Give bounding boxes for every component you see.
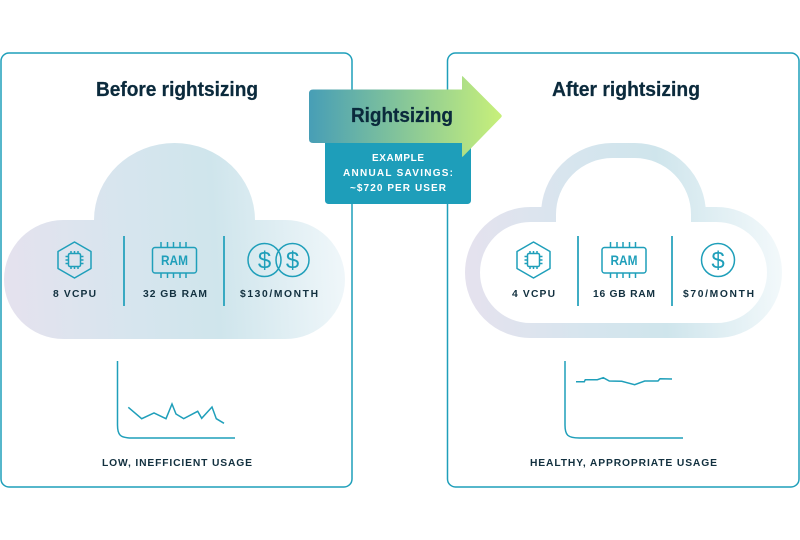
icon: dollar coin: $ [711,248,725,274]
label: 32 GB RAM: 32 GB RAM [143,289,207,300]
icon: two dollar coins: $ [258,248,271,274]
cloud: before, filled [4,143,345,339]
callout: example savings: EXAMPLE [372,153,424,164]
label: 4 vCPU: 4 VCPU [512,289,555,300]
icon: cpu, 8 vCPU [58,242,91,278]
arrow: rightsizing: Rightsizing [351,104,453,127]
caption: healthy usage: HEALTHY, APPROPRIATE USAGE [530,458,717,469]
chart: healthy usage [565,361,683,438]
chart: low usage [118,361,235,438]
heading: before rightsizing: Before rightsizing [96,78,258,101]
label: $130/month: $130/MONTH [240,289,318,300]
icon: RAM module, 32 GB [152,242,196,278]
icon: dollar coin [702,244,734,276]
icon: RAM module, 16 GB [602,242,646,278]
cloud: after, outlined [473,150,774,330]
callout: example savings: ~$720 PER USER [350,183,447,194]
label: 16 GB RAM: 16 GB RAM [593,289,655,300]
callout: example savings: ANNUAL SAVINGS: [343,168,453,179]
caption: low usage: LOW, INEFFICIENT USAGE [102,458,252,469]
icon: RAM module, 32 GB: RAM [161,252,188,268]
icon: RAM module, 16 GB: RAM [610,252,638,268]
arrow: rightsizing [309,76,502,157]
icon: two dollar coins [248,244,309,276]
callout: example savings [325,135,471,204]
heading: after rightsizing: After rightsizing [552,78,700,101]
label: $70/month: $70/MONTH [683,289,754,300]
icon: cpu, 4 vCPU [517,242,550,278]
panel: after rightsizing [448,53,799,487]
icon: two dollar coins: $ [286,248,299,274]
label: 8 vCPU: 8 VCPU [53,289,96,300]
panel: before rightsizing [1,53,352,487]
